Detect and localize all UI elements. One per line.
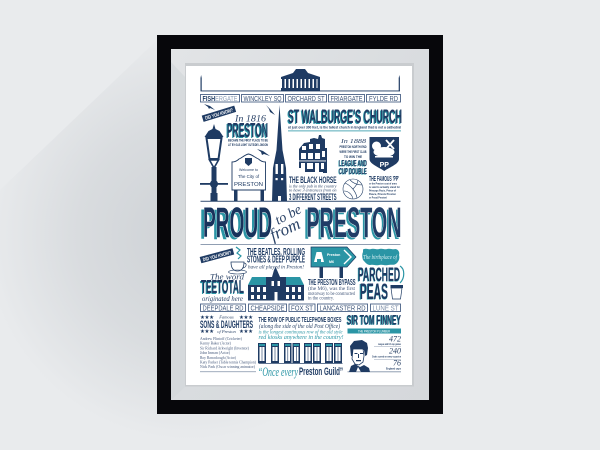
stats: tom finney: 76 (393, 358, 401, 368)
heading: st walburge's church (287, 107, 402, 131)
icon: welcome to preston sign: Welcome to (239, 168, 258, 172)
poster: PRESTON (306, 199, 402, 247)
main title: proud to be from preston: PROUD (203, 199, 272, 247)
stats: tom finney: 240 (389, 346, 401, 356)
poster: PARCHED (358, 265, 400, 286)
banner: did you know: DID YOU KNOW? (204, 108, 234, 122)
poster: SONS & DAUGHTERS (200, 319, 253, 331)
text: the famous pp (369, 176, 401, 200)
text: the famous pp: THE FAMOUS 'PP' (369, 176, 399, 183)
mount inner shadow (171, 62, 186, 400)
poster: 3 DIFFERENT STREETS (289, 192, 336, 202)
text: in 1888 league and cup double: WERE THE FIRST CLUB (340, 150, 367, 154)
heading: st walburge's church: at just over 300 feet, is the tallest church in England that is not a cathedral (288, 124, 401, 130)
stats: tom finney (348, 334, 401, 372)
text: in 1888 league and cup double: CUP DOUBLE (339, 166, 367, 176)
text: in 1816 preston: LIT BY GAS LIGHT OUTSIDE LONDON (228, 143, 268, 147)
text: in 1888 league and cup double: LEAGUE AND (339, 158, 367, 168)
icon: welcome to preston sign: PRESTON (234, 182, 263, 188)
list: famous names: Katy Parker (Table tennis Champion) (200, 360, 257, 364)
text: in 1888 league and cup double: PRESTON NORTH END (340, 145, 367, 149)
stats: tom finney: Goals scored on every occasion (372, 354, 401, 358)
poster: PRESTON (306, 199, 402, 247)
text: the black horse: THE BLACK HORSE (289, 175, 336, 186)
icon: black horse pub (299, 135, 327, 173)
poster: TEETOTAL (200, 278, 244, 298)
poster edge (185, 63, 414, 386)
poster: STONES & DEEP PURPLE (247, 254, 305, 266)
text: the preston bypass: (the M6), was the first (308, 287, 356, 292)
main title: proud to be from preston: to be (273, 202, 304, 229)
street names row two: FOX ST (291, 305, 314, 312)
text: the preston bypass: THE PRESTON BYPASS (308, 278, 356, 287)
text: famous sons and daughters: ★★★ (200, 315, 214, 321)
heading: sir tom finney (346, 312, 401, 334)
text: the famous pp: or the Preston coat of arms (369, 182, 397, 186)
icon: seagulls (204, 104, 275, 156)
poster: PRESTON (227, 120, 268, 142)
main title: proud to be from preston: PROUD (200, 201, 270, 249)
text: in 1888 league and cup double: In 1888 (340, 138, 367, 145)
text: the black horse: to have 3 entrances from on (289, 188, 337, 192)
stats: tom finney: League and FA cup games (378, 342, 401, 346)
stats: tom finney: 472 (389, 334, 401, 344)
icon: teacup with steam (228, 247, 246, 274)
poster: PRESTON (304, 201, 400, 249)
text: the word teetotal: The word (210, 272, 245, 282)
text: in 1816 preston: BECAME THE FIRST PLACE TO BE (228, 138, 268, 142)
list: famous names: Andrew Flintoff (Cricketer) (200, 336, 243, 341)
icon: welcome to preston sign (232, 154, 266, 201)
icon: harris museum skyline (200, 69, 400, 91)
text: in 1888 league and cup double: LEAGUE AND (338, 159, 366, 169)
icon: motorway sign: M6 (329, 260, 334, 264)
poster: PRESTON (226, 121, 267, 143)
street names row two: CHEAPSIDE (250, 305, 285, 312)
text: famous sons and daughters: ★★★ (239, 329, 253, 335)
icon: public hall building (248, 267, 304, 300)
heading: sir tom finney: THE PRESTON PLUMBER (358, 329, 390, 334)
text: the famous pp: Peace, Priests Preston (369, 192, 396, 196)
street names row two: DEEPDALE RD (202, 305, 244, 312)
text: the word teetotal (200, 272, 245, 303)
list: famous names: Kenny Baker (Actor) (200, 341, 232, 346)
text: birthplace of parched peas: The birthplace of (363, 254, 398, 261)
text: the famous pp: Princeps Pacis, Prince of (369, 188, 397, 192)
banner: did you know two (200, 248, 234, 264)
text: in 1816 preston: In 1816 (234, 114, 266, 124)
text: famous sons and daughters: Famous (218, 314, 234, 320)
poster: TEETOTAL (201, 277, 244, 297)
text: famous sons and daughters (200, 314, 253, 335)
text: birthplace of parched peas: PEAS (359, 280, 388, 305)
text: famous sons and daughters: ★★★ (239, 315, 253, 321)
text: row of public telephone boxes: red kiosks anywhere in the country! (258, 334, 344, 341)
text: row of public telephone boxes: (along the side of the old Post Office) (259, 323, 340, 330)
poster: ST WALBURGE'S CHURCH (288, 107, 402, 128)
frame cast shadow (0, 40, 442, 450)
text: the preston bypass: motorway to be constructed (308, 292, 356, 297)
list: famous names: Nick Park (Oscar winning animator) (200, 364, 256, 369)
text: in 1816 preston (226, 114, 268, 147)
text: row of public telephone boxes: THE ROW OF PUBLIC TELEPHONE BOXES (258, 315, 342, 324)
text: the black horse: is the only pub in the country (289, 184, 337, 188)
street names row one: FYLDE RD (369, 96, 398, 103)
text: the beatles: have all played in Preston! (248, 264, 304, 270)
icon: motorway sign (311, 247, 356, 278)
divider below main title (200, 243, 400, 246)
street names row one: FISHERGATE (202, 96, 238, 103)
divider above main title (200, 200, 400, 203)
text: the word teetotal: originated here (202, 295, 243, 303)
text: once every preston guild: “Once every (258, 364, 298, 379)
text: the famous pp: or Proud Preston! (369, 196, 387, 200)
text: row of public telephone boxes (258, 315, 344, 341)
mount board (171, 49, 429, 400)
icon: motorway sign: Preston (327, 253, 340, 257)
text: the preston bypass (308, 278, 356, 302)
icon: gas street lamp (200, 124, 228, 201)
street names row one: WINCKLEY SQ (244, 96, 282, 103)
stats: tom finney: England caps (386, 366, 401, 370)
icon: st walburge's spire (272, 105, 287, 201)
poster: SIR TOM FINNEY (347, 312, 401, 328)
list: famous names (200, 336, 257, 372)
banner: did you know (202, 106, 236, 123)
street names row two: LUNE ST (372, 305, 399, 312)
text: the famous pp: is said to actually stand for (369, 185, 401, 189)
text: birthplace of parched peas: PEAS (360, 279, 388, 304)
icon: welcome to preston sign: The City of (238, 174, 260, 179)
text: the preston bypass: in the country. (308, 296, 334, 302)
icon: telephone boxes (258, 343, 342, 364)
icon: vintage football (343, 179, 363, 199)
street names row two (200, 304, 400, 312)
list: famous names: Roy Barraclough (Actor) (200, 355, 237, 360)
text: the beatles (247, 247, 305, 270)
poster: THE BEATLES, ROLLING (247, 247, 305, 258)
icon: tom finney portrait (349, 340, 370, 372)
text: birthplace of parched peas: PARCHED (357, 266, 400, 287)
text: famous sons and daughters: of Preston (217, 329, 236, 334)
poster: SIR TOM FINNEY (346, 312, 401, 328)
icon: paper cup (390, 285, 403, 299)
picture frame (157, 35, 443, 414)
banner: did you know two: DID YOU KNOW? (202, 250, 232, 263)
poster: ST WALBURGE'S CHURCH (287, 108, 401, 129)
main title: proud to be from preston: PROUD (203, 199, 272, 247)
text: in 1888 league and cup double (338, 138, 367, 177)
street names row one: ORCHARD ST (288, 96, 325, 103)
icon: preston north end crest: PP (380, 162, 389, 169)
street names row one (200, 94, 400, 103)
text: in 1888 league and cup double: CUP DOUBLE (338, 167, 366, 177)
main title: proud to be from preston: from (267, 214, 303, 245)
text: famous sons and daughters: ★★★ (200, 329, 214, 335)
poster (186, 66, 412, 385)
list: famous names: John Inman (Actor) (200, 350, 231, 355)
text: in 1888 league and cup double: TO WIN THE (344, 155, 362, 159)
text: birthplace of parched peas (357, 249, 404, 305)
street names row one: FRIARGATE (330, 96, 363, 103)
icon: preston north end crest (370, 137, 399, 171)
text: row of public telephone boxes: is the longest continuous row of the old style (258, 328, 343, 336)
list: famous names: Sir Richard Arkwright (Inventor) (200, 345, 250, 350)
text: once every preston guild: Preston Guild” (299, 366, 343, 378)
text: the black horse (289, 175, 337, 202)
street names row two: LANCASTER RD (320, 305, 366, 312)
